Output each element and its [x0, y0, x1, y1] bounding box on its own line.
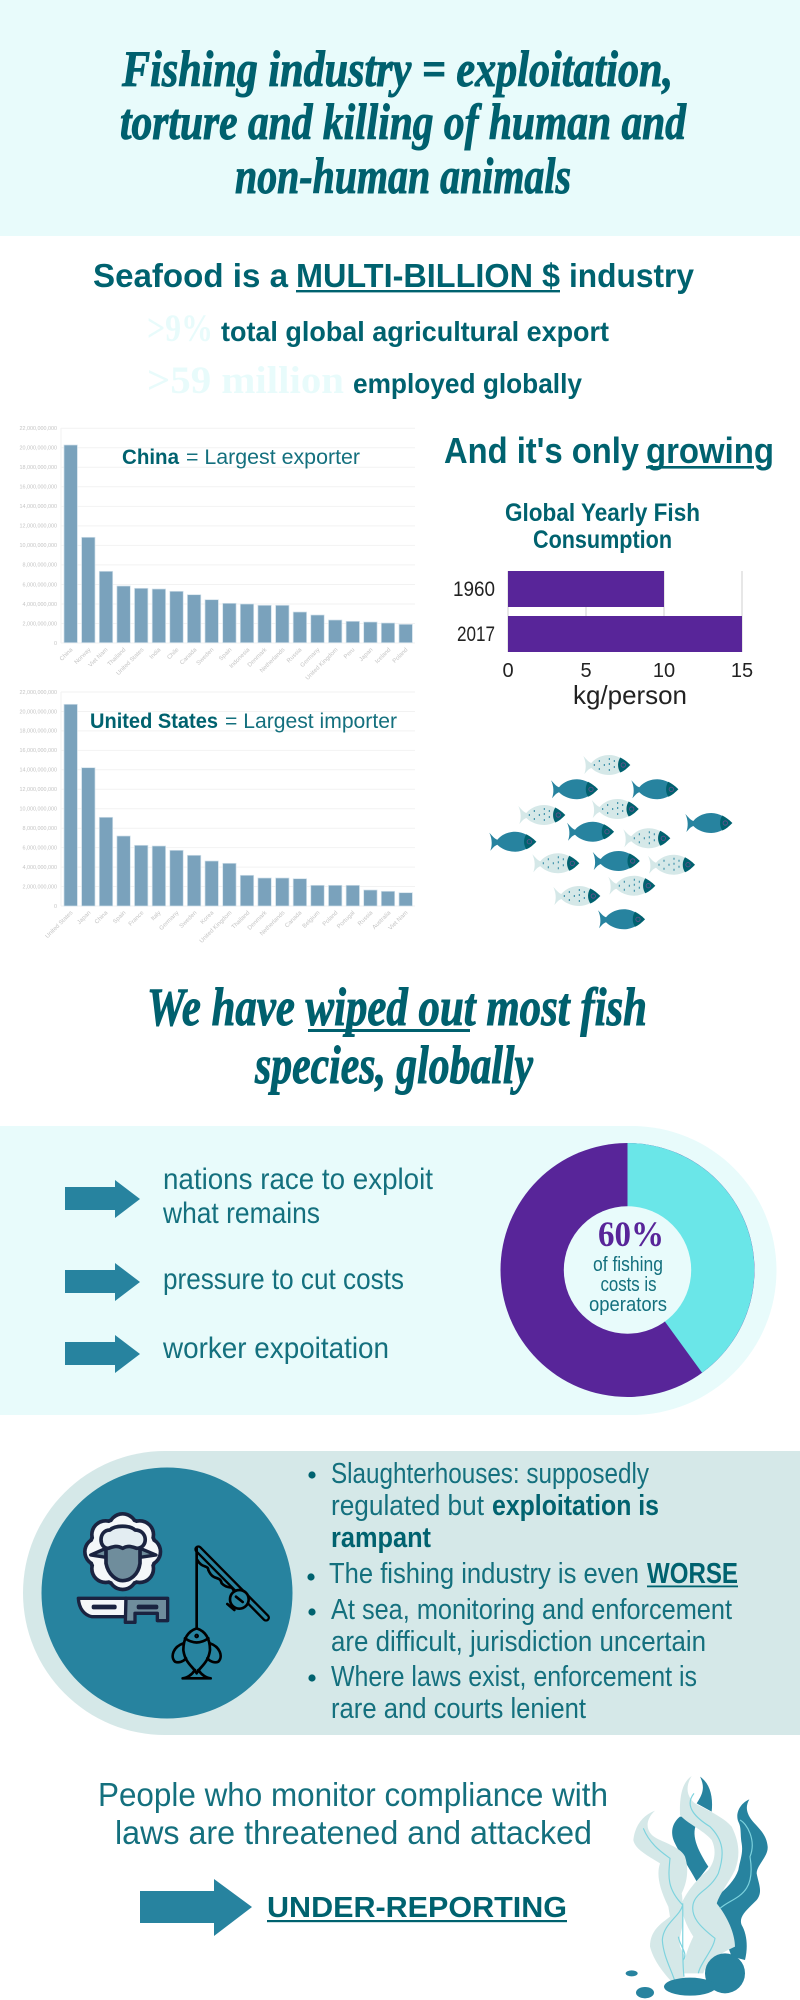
bar chart: largest exporters: Poland	[392, 647, 409, 665]
bar chart: largest importers: Canada	[284, 910, 304, 929]
text: monitors threatened	[98, 1776, 608, 1851]
donut chart: 60 percent: of fishing	[593, 1254, 663, 1276]
heading: wiped out	[147, 977, 647, 1095]
bar chart: largest importers: Korea	[200, 910, 216, 926]
bar chart: global yearly fish consumption: 10	[653, 660, 675, 682]
bar chart: largest exporters	[20, 426, 415, 682]
bar chart: largest exporters: Netherlands	[259, 647, 286, 674]
heading: seafood multi-billion: industry	[569, 257, 695, 294]
bar chart: largest exporters: 6,000,000,000	[23, 582, 57, 588]
bar chart: largest importers: United States	[45, 910, 74, 940]
stat: 59 million employed	[147, 359, 582, 402]
text: nations race: nations race to exploit	[163, 1163, 434, 1196]
donut chart: 60 percent: operators	[589, 1294, 667, 1316]
panel: race to exploit	[0, 1126, 776, 1415]
bar chart: largest importers: Spain	[112, 910, 127, 925]
bar chart: largest exporters: 22,000,000,000	[20, 426, 57, 432]
bar chart: largest exporters: 14,000,000,000	[20, 504, 57, 510]
bar chart: largest exporters: 0	[54, 641, 57, 647]
bar chart: largest importers: Germany	[159, 910, 180, 932]
heading: only growing: growing	[646, 430, 774, 471]
chart caption: United States: = Largest importer	[225, 710, 397, 733]
bar chart: largest importers: 20,000,000,000	[20, 709, 57, 715]
illustration: school of fish	[489, 755, 732, 929]
heading: seafood multi-billion: Seafood is a	[93, 257, 289, 294]
arrow: nations race	[65, 1180, 140, 1218]
bar chart: largest importers: 22,000,000,000	[20, 690, 57, 696]
text: worker: worker expoitation	[162, 1332, 389, 1365]
text: nations race	[162, 1163, 434, 1230]
bar chart: largest importers	[20, 690, 415, 945]
icon: fishing rod and fish	[173, 1548, 266, 1678]
chart title: Consumption	[533, 526, 672, 554]
bar chart: largest exporters: 10,000,000,000	[20, 543, 57, 549]
bar chart: global yearly fish consumption: 2017	[457, 623, 495, 646]
text: nations race: what remains	[162, 1197, 320, 1230]
donut chart: 60 percent	[500, 1143, 754, 1397]
chart caption: China: = Largest exporter	[186, 446, 360, 469]
heading: wiped out: We have wiped out most fish	[147, 977, 647, 1037]
title: Fishing industry = exploitation,	[121, 42, 673, 98]
bar chart: largest exporters: Chile	[166, 647, 181, 661]
chart title: Global Yearly Fish	[505, 499, 700, 527]
header band	[0, 0, 800, 236]
arrow: to under-reporting	[140, 1879, 252, 1936]
bar chart: largest exporters: 18,000,000,000	[20, 465, 57, 471]
donut chart: 60 percent: 60%	[598, 1214, 664, 1254]
bulleted list: Where laws exist, enforcement is	[331, 1661, 697, 1693]
bar chart: largest exporters: 2,000,000,000	[23, 621, 57, 627]
bar chart: largest exporters: China	[59, 647, 75, 663]
bulleted list: WORSE	[647, 1558, 738, 1590]
bar chart: largest importers: Russia	[357, 910, 375, 927]
bar chart: largest importers: Italy	[150, 910, 162, 922]
text: under-reporting: UNDER-REPORTING	[267, 1892, 567, 1924]
bar chart: largest exporters: 20,000,000,000	[20, 446, 57, 452]
chart caption: United States	[90, 710, 397, 733]
panel: enforcement	[23, 1451, 800, 1735]
text: monitors threatened: People who monitor compliance with	[98, 1776, 608, 1813]
bar chart: largest importers: 6,000,000,000	[23, 845, 57, 851]
bar chart: largest importers: United Kingdom	[199, 910, 233, 945]
bulleted list: The fishing industry is even	[329, 1558, 639, 1590]
bar chart: largest importers: 16,000,000,000	[20, 748, 57, 754]
stat: 9 percent export: >9%	[147, 307, 213, 350]
bar chart: largest exporters: Russia	[286, 647, 304, 664]
icon: sheep and knife	[78, 1516, 168, 1622]
donut chart: 60 percent: costs is	[600, 1274, 656, 1296]
bar chart: largest importers: Portugal	[336, 910, 356, 930]
bar chart: largest importers: 8,000,000,000	[23, 826, 57, 832]
bar chart: largest exporters: 8,000,000,000	[23, 563, 57, 569]
bar chart: largest importers: Sweden	[179, 910, 198, 930]
text: monitors threatened: laws are threatened and attacked	[115, 1814, 592, 1851]
bulleted list: rampant	[331, 1522, 431, 1554]
icon circle	[42, 1468, 292, 1718]
bar chart: largest importers: 0	[54, 904, 57, 910]
bar chart: largest importers: China	[94, 910, 110, 926]
bar chart: largest importers: 12,000,000,000	[20, 787, 57, 793]
bar chart: largest importers: Japan	[77, 910, 92, 926]
bar chart: largest exporters: Indonesia	[229, 647, 252, 670]
bar chart: largest exporters: Iceland	[374, 647, 392, 665]
title	[120, 42, 687, 205]
bar chart: largest importers: 10,000,000,000	[20, 806, 57, 812]
bar chart: largest importers: Thailand	[231, 910, 251, 931]
bar chart: largest importers: 18,000,000,000	[20, 729, 57, 735]
title: torture and killing of human and	[120, 95, 687, 151]
bar chart: largest exporters: Peru	[343, 647, 356, 660]
heading: wiped out: species, globally	[254, 1035, 534, 1095]
bar chart: largest exporters: Thailand	[107, 647, 127, 668]
bar chart: largest exporters: United States	[116, 647, 145, 677]
text: pressure: pressure to cut costs	[163, 1263, 404, 1296]
chart caption: China: China	[122, 446, 179, 469]
stat: 59 million employed: >59 million	[147, 359, 344, 402]
bar chart: largest exporters: United Kingdom	[305, 647, 339, 682]
bar chart: largest importers: 4,000,000,000	[23, 865, 57, 871]
bulleted list: rare and courts lenient	[331, 1693, 586, 1725]
bar chart: largest exporters: 12,000,000,000	[20, 524, 57, 530]
bar chart: largest importers: Australia	[372, 910, 393, 931]
bar chart: largest importers: Netherlands	[259, 910, 286, 937]
chart caption: United States: United States	[90, 710, 218, 733]
bar chart: global yearly fish consumption: 15	[731, 660, 753, 682]
bar chart: largest exporters: Sweden	[196, 647, 215, 667]
stat: 9 percent export: total global agricultural export	[221, 316, 609, 347]
bulleted list: Slaughterhouses: supposedly	[331, 1458, 649, 1490]
bar chart: largest importers: 2,000,000,000	[23, 884, 57, 890]
bar chart: largest exporters: 16,000,000,000	[20, 485, 57, 491]
bar chart: largest exporters: Denmark	[247, 646, 269, 669]
bar chart: largest exporters: Viet Nam	[88, 647, 109, 669]
heading: seafood multi-billion	[93, 257, 695, 294]
bar chart: global yearly fish consumption: 1960	[453, 578, 495, 601]
heading: seafood multi-billion: MULTI-BILLION $	[296, 257, 560, 294]
arrow: pressure	[65, 1263, 140, 1301]
bulleted list	[307, 1458, 738, 1725]
bar chart: global yearly fish consumption: 5	[580, 660, 592, 682]
bar chart: largest exporters: Germany	[300, 647, 321, 669]
illustration: seaweed and rocks	[626, 1776, 768, 1998]
arrow: worker	[65, 1335, 140, 1373]
bar chart: largest importers: France	[128, 910, 146, 928]
title: non-human animals	[235, 149, 571, 205]
bulleted list: At sea, monitoring and enforcement	[331, 1594, 732, 1626]
bar chart: largest importers: Viet Nam	[388, 910, 409, 932]
bulleted list: regulated but	[331, 1490, 484, 1522]
chart title	[505, 499, 700, 554]
bar chart: global yearly fish consumption: kg/person	[573, 680, 687, 710]
bar chart: largest exporters: Norway	[74, 647, 92, 666]
heading: only growing: And it's only	[444, 430, 639, 471]
bar chart: largest exporters: Spain	[218, 647, 233, 662]
bar chart: largest exporters: Canada	[179, 647, 199, 666]
bar chart: largest exporters: India	[149, 647, 163, 661]
stat: 59 million employed: employed globally	[353, 368, 582, 399]
bar chart: largest exporters: 4,000,000,000	[23, 602, 57, 608]
bar chart: largest importers: Belgium	[302, 910, 321, 930]
bulleted list: are difficult, jurisdiction uncertain	[331, 1626, 706, 1658]
bar chart: largest importers: Denmark	[247, 909, 269, 932]
bar chart: largest exporters: Japan	[359, 647, 374, 663]
bar chart: global yearly fish consumption: 0	[502, 660, 514, 682]
bar chart: global yearly fish consumption	[453, 499, 753, 710]
bar chart: largest importers: 14,000,000,000	[20, 768, 57, 774]
bulleted list: exploitation is	[492, 1490, 659, 1522]
stat: 9 percent export	[147, 307, 609, 350]
heading: only growing	[444, 430, 774, 471]
bar chart: largest importers: Poland	[322, 910, 339, 928]
